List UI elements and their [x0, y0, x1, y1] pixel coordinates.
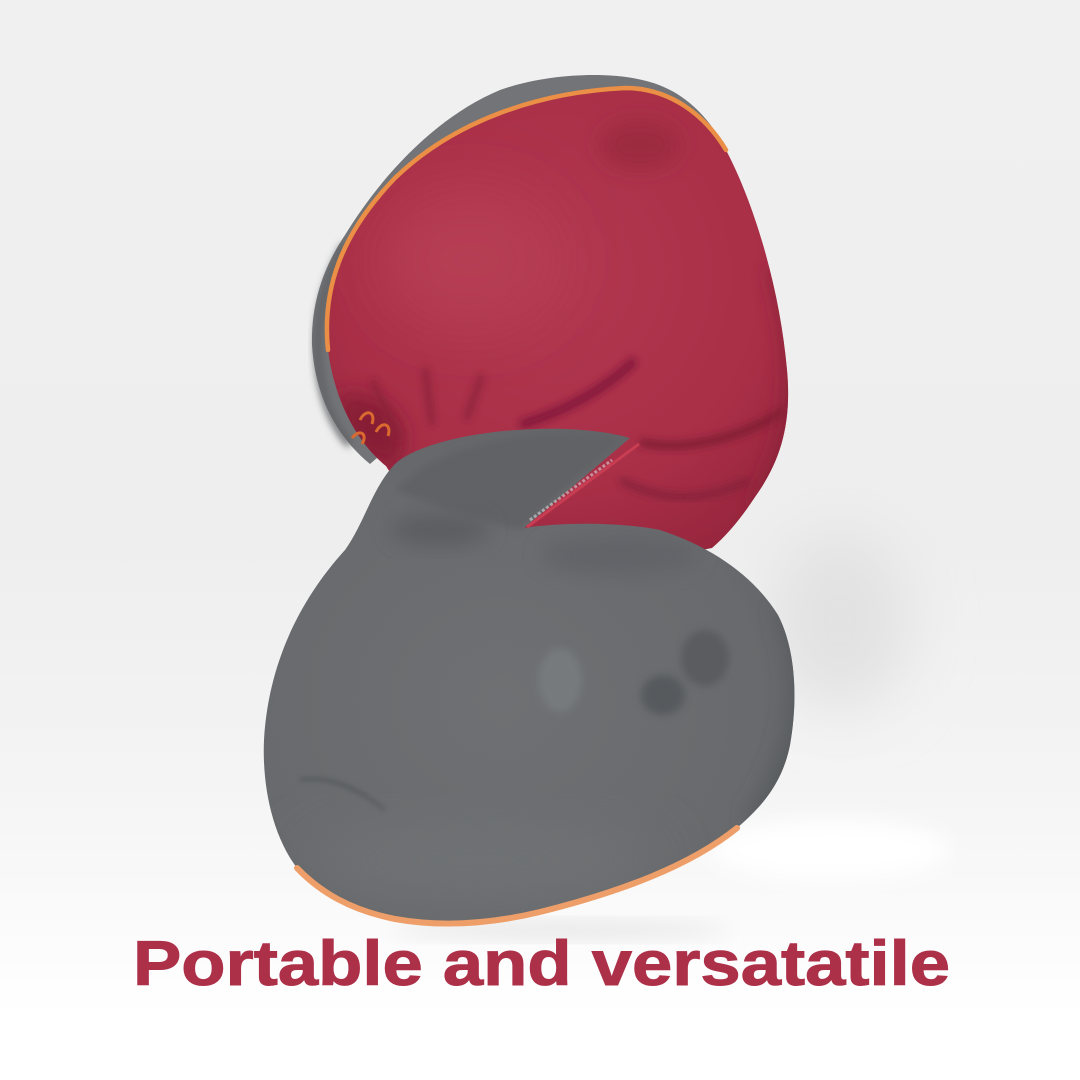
orange piping top	[327, 88, 726, 350]
red seam and stitching in fold	[527, 444, 639, 527]
title: Portable and versatatile	[133, 929, 950, 999]
top pillow red velvet	[328, 90, 788, 550]
top pillow grey back	[312, 75, 726, 464]
embroidered logo	[352, 413, 389, 444]
orange piping bottom	[297, 828, 737, 923]
bottom pillow grey body	[264, 428, 794, 921]
fabric backdrop shading	[390, 530, 950, 938]
pillow: folded travel cushion	[250, 70, 820, 935]
